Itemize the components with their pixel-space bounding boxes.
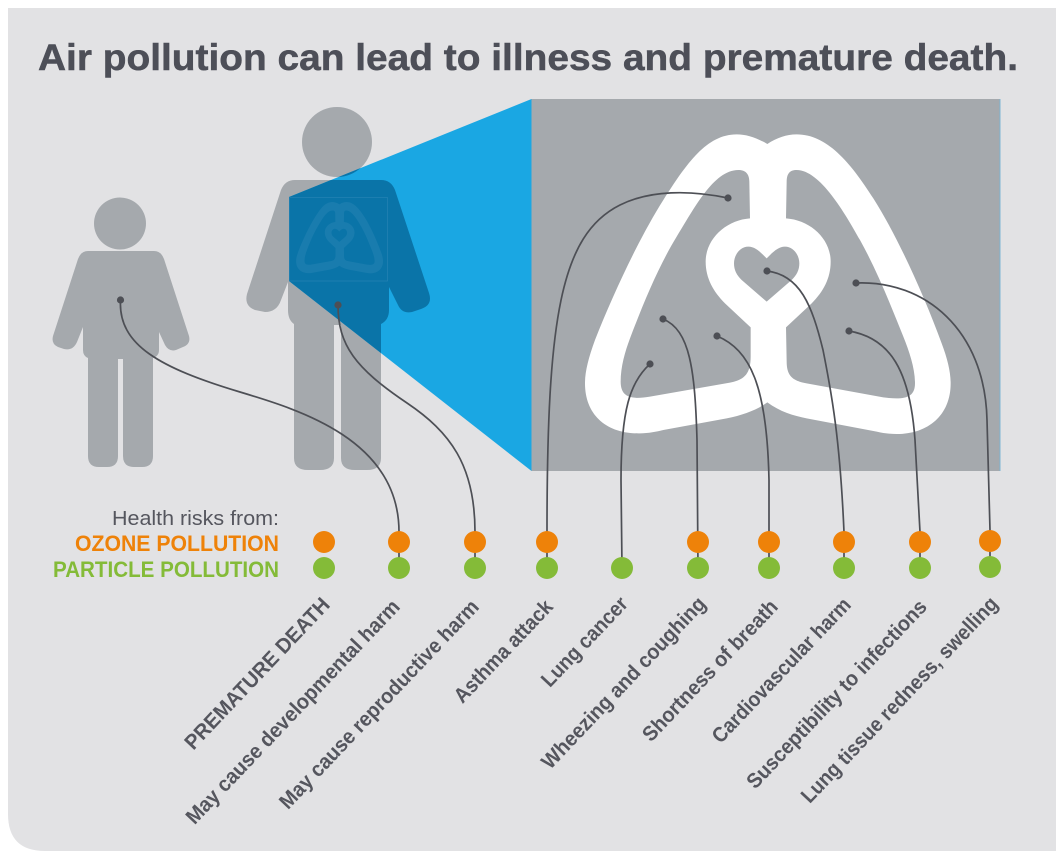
rotated risk labels: May cause reproductive harm — [275, 595, 484, 814]
rotated risk labels — [180, 592, 1003, 829]
rotated risk labels: Asthma attack — [449, 595, 558, 708]
beam overlap on adult body — [289, 168, 430, 353]
figure: adult silhouette — [246, 107, 430, 470]
legend: Health risks from: — [112, 508, 279, 530]
legend: OZONE POLLUTION — [75, 531, 279, 556]
rotated risk labels: Shortness of breath — [638, 595, 783, 746]
title: Air pollution can lead to illness and premature death. — [38, 36, 1018, 78]
rotated risk labels: Wheezing and coughing — [537, 592, 711, 774]
connector end points — [117, 194, 860, 368]
legend — [53, 508, 279, 582]
blue magnification beam — [289, 99, 532, 471]
ozone pollution dots — [313, 530, 1001, 553]
rotated risk labels: Cardiovascular harm — [708, 593, 856, 748]
white lungs and heart — [585, 134, 951, 434]
rotated risk labels: Lung tissue redness, swelling — [797, 592, 1003, 808]
rotated risk labels: Susceptibility to infections — [742, 595, 932, 793]
small lungs inside adult chest — [290, 198, 388, 281]
figure: child silhouette — [53, 198, 189, 467]
rotated risk labels: PREMATURE DEATH — [180, 593, 335, 754]
connector lines from body locations to risk dots — [120, 193, 990, 568]
legend: PARTICLE POLLUTION — [53, 557, 279, 582]
rotated risk labels: Lung cancer — [537, 592, 633, 692]
rotated risk labels: May cause developmental harm — [182, 595, 405, 829]
particle pollution dots — [313, 556, 1001, 579]
lung close-up panel — [532, 99, 1000, 471]
